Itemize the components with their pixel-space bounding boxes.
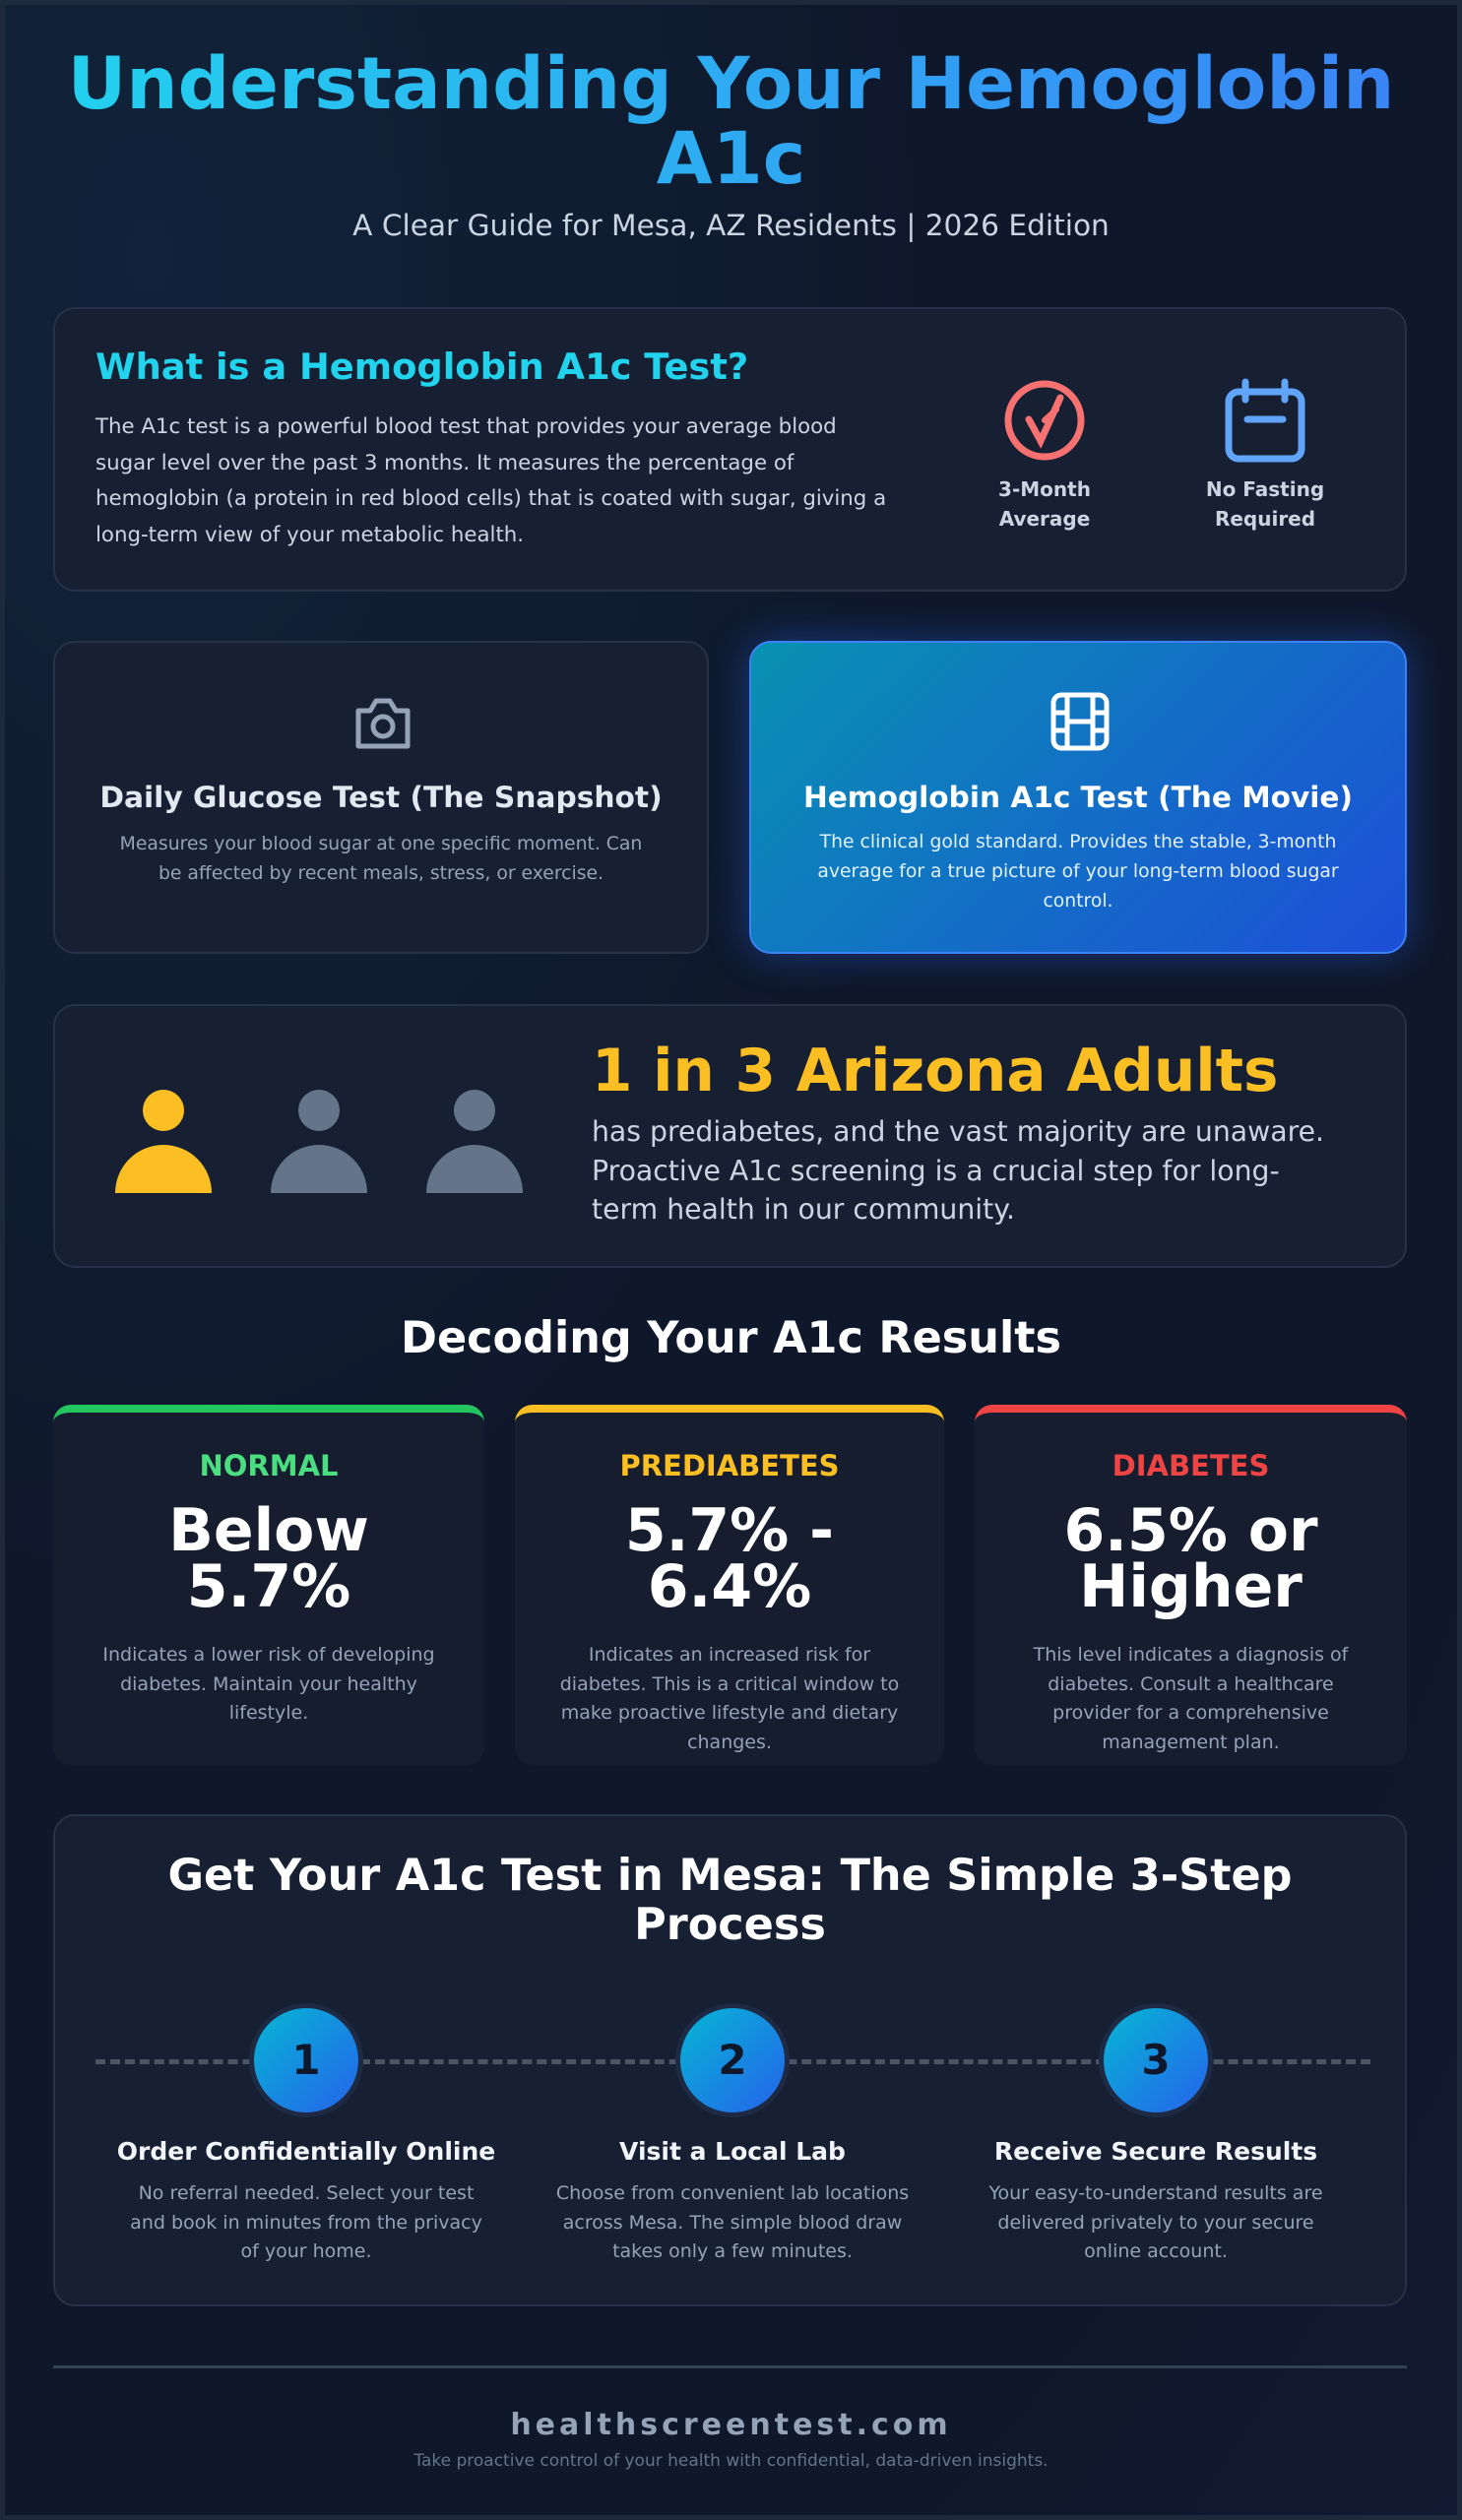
step 2 [556, 2003, 909, 2262]
icon: calendar no fasting: Required [1215, 507, 1315, 531]
card: diabetes: DIABETES [1112, 1449, 1269, 1482]
panel: 3-step process [53, 1814, 1407, 2306]
step 2: 2 [718, 2036, 747, 2084]
title: Understanding Your Hemoglobin A1c [68, 42, 1394, 201]
card: prediabetes: Indicates an increased risk for diabetes. This is a critical window to make proactive lifestyle and dietary changes. [560, 1644, 899, 1752]
card: normal [53, 1405, 484, 1765]
card: prediabetes [515, 1405, 944, 1765]
icon: people [115, 1090, 523, 1193]
stat text: has prediabetes, and the vast majority are unaware. Proactive A1c screening is a crucial step for long-term health in our community. [592, 1115, 1324, 1226]
step 1: 1 [291, 2036, 321, 2084]
heading: Daily Glucose Test (The Snapshot) [99, 781, 663, 815]
step 3: 3 [1141, 2036, 1171, 2084]
description: Measures your blood sugar at one specific moment. Can be affected by recent meals, stress, or exercise. [120, 834, 642, 884]
icon: camera [356, 699, 410, 748]
card: diabetes: 6.5% or [1063, 1496, 1318, 1565]
description: The clinical gold standard. Provides the stable, 3-month average for a true picture of your long-term blood sugar control. [817, 832, 1339, 912]
card: normal: 5.7% [187, 1552, 350, 1621]
heading: decoding results: Decoding Your A1c Results [401, 1313, 1061, 1363]
icon: calendar no fasting: No Fasting [1206, 477, 1324, 501]
card: normal: Indicates a lower risk of developing diabetes. Maintain your healthy lifestyle. [102, 1644, 435, 1724]
icon: 3-month clock: 3-Month [998, 477, 1091, 501]
heading: Process [634, 1900, 826, 1950]
subtitle: A Clear Guide for Mesa, AZ Residents | 2026 Edition [352, 209, 1110, 242]
card: diabetes: This level indicates a diagnosis of diabetes. Consult a healthcare provider for a comprehensive management plan. [1034, 1644, 1348, 1752]
body text: The A1c test is a powerful blood test that provides your average blood sugar level over the past 3 months. It measures the percentage of hemoglobin (a protein in red blood cells) that is coated with sugar, giving a long-term view of your metabolic health. [95, 414, 886, 547]
dashed connector [95, 2059, 1370, 2064]
step 1 [117, 2003, 495, 2262]
stat heading: 1 in 3 Arizona Adults [592, 1038, 1278, 1105]
panel: daily glucose snapshot [53, 641, 709, 954]
card: normal: NORMAL [199, 1449, 339, 1482]
step 1: No referral needed. Select your test and book in minutes from the privacy of your home. [130, 2182, 482, 2262]
step 1: Order Confidentially Online [117, 2137, 495, 2166]
panel: A1c movie [749, 641, 1407, 954]
heading [167, 1851, 1293, 1950]
step 3: Your easy-to-understand results are delivered privately to your secure online account. [988, 2182, 1323, 2262]
card: prediabetes: 5.7% - [625, 1496, 834, 1565]
icon: 3-month clock [998, 380, 1091, 531]
footer tagline: Take proactive control of your health with confidential, data-driven insights. [413, 2451, 1049, 2471]
heading: Get Your A1c Test in Mesa: The Simple 3-Step [167, 1851, 1293, 1901]
card: normal: Below [168, 1496, 369, 1565]
panel: Arizona stat [53, 1004, 1407, 1268]
icon: film [1051, 693, 1109, 750]
card: diabetes: Higher [1079, 1552, 1303, 1621]
footer domain: healthscreentest.com [510, 2408, 952, 2442]
card: prediabetes: 6.4% [648, 1552, 811, 1621]
card: prediabetes: PREDIABETES [619, 1449, 840, 1482]
icon: 3-month clock: Average [999, 507, 1090, 531]
step 3 [988, 2003, 1323, 2262]
step 3: Receive Secure Results [994, 2137, 1317, 2166]
step 2: Visit a Local Lab [619, 2137, 846, 2166]
step 2: Choose from convenient lab locations across Mesa. The simple blood draw takes only a few minutes. [556, 2182, 909, 2262]
card: diabetes [975, 1405, 1407, 1765]
panel: what is A1c [53, 307, 1407, 592]
heading: Hemoglobin A1c Test (The Movie) [803, 781, 1353, 814]
heading: What is a Hemoglobin A1c Test? [95, 346, 748, 388]
icon: calendar no fasting [1206, 378, 1324, 531]
